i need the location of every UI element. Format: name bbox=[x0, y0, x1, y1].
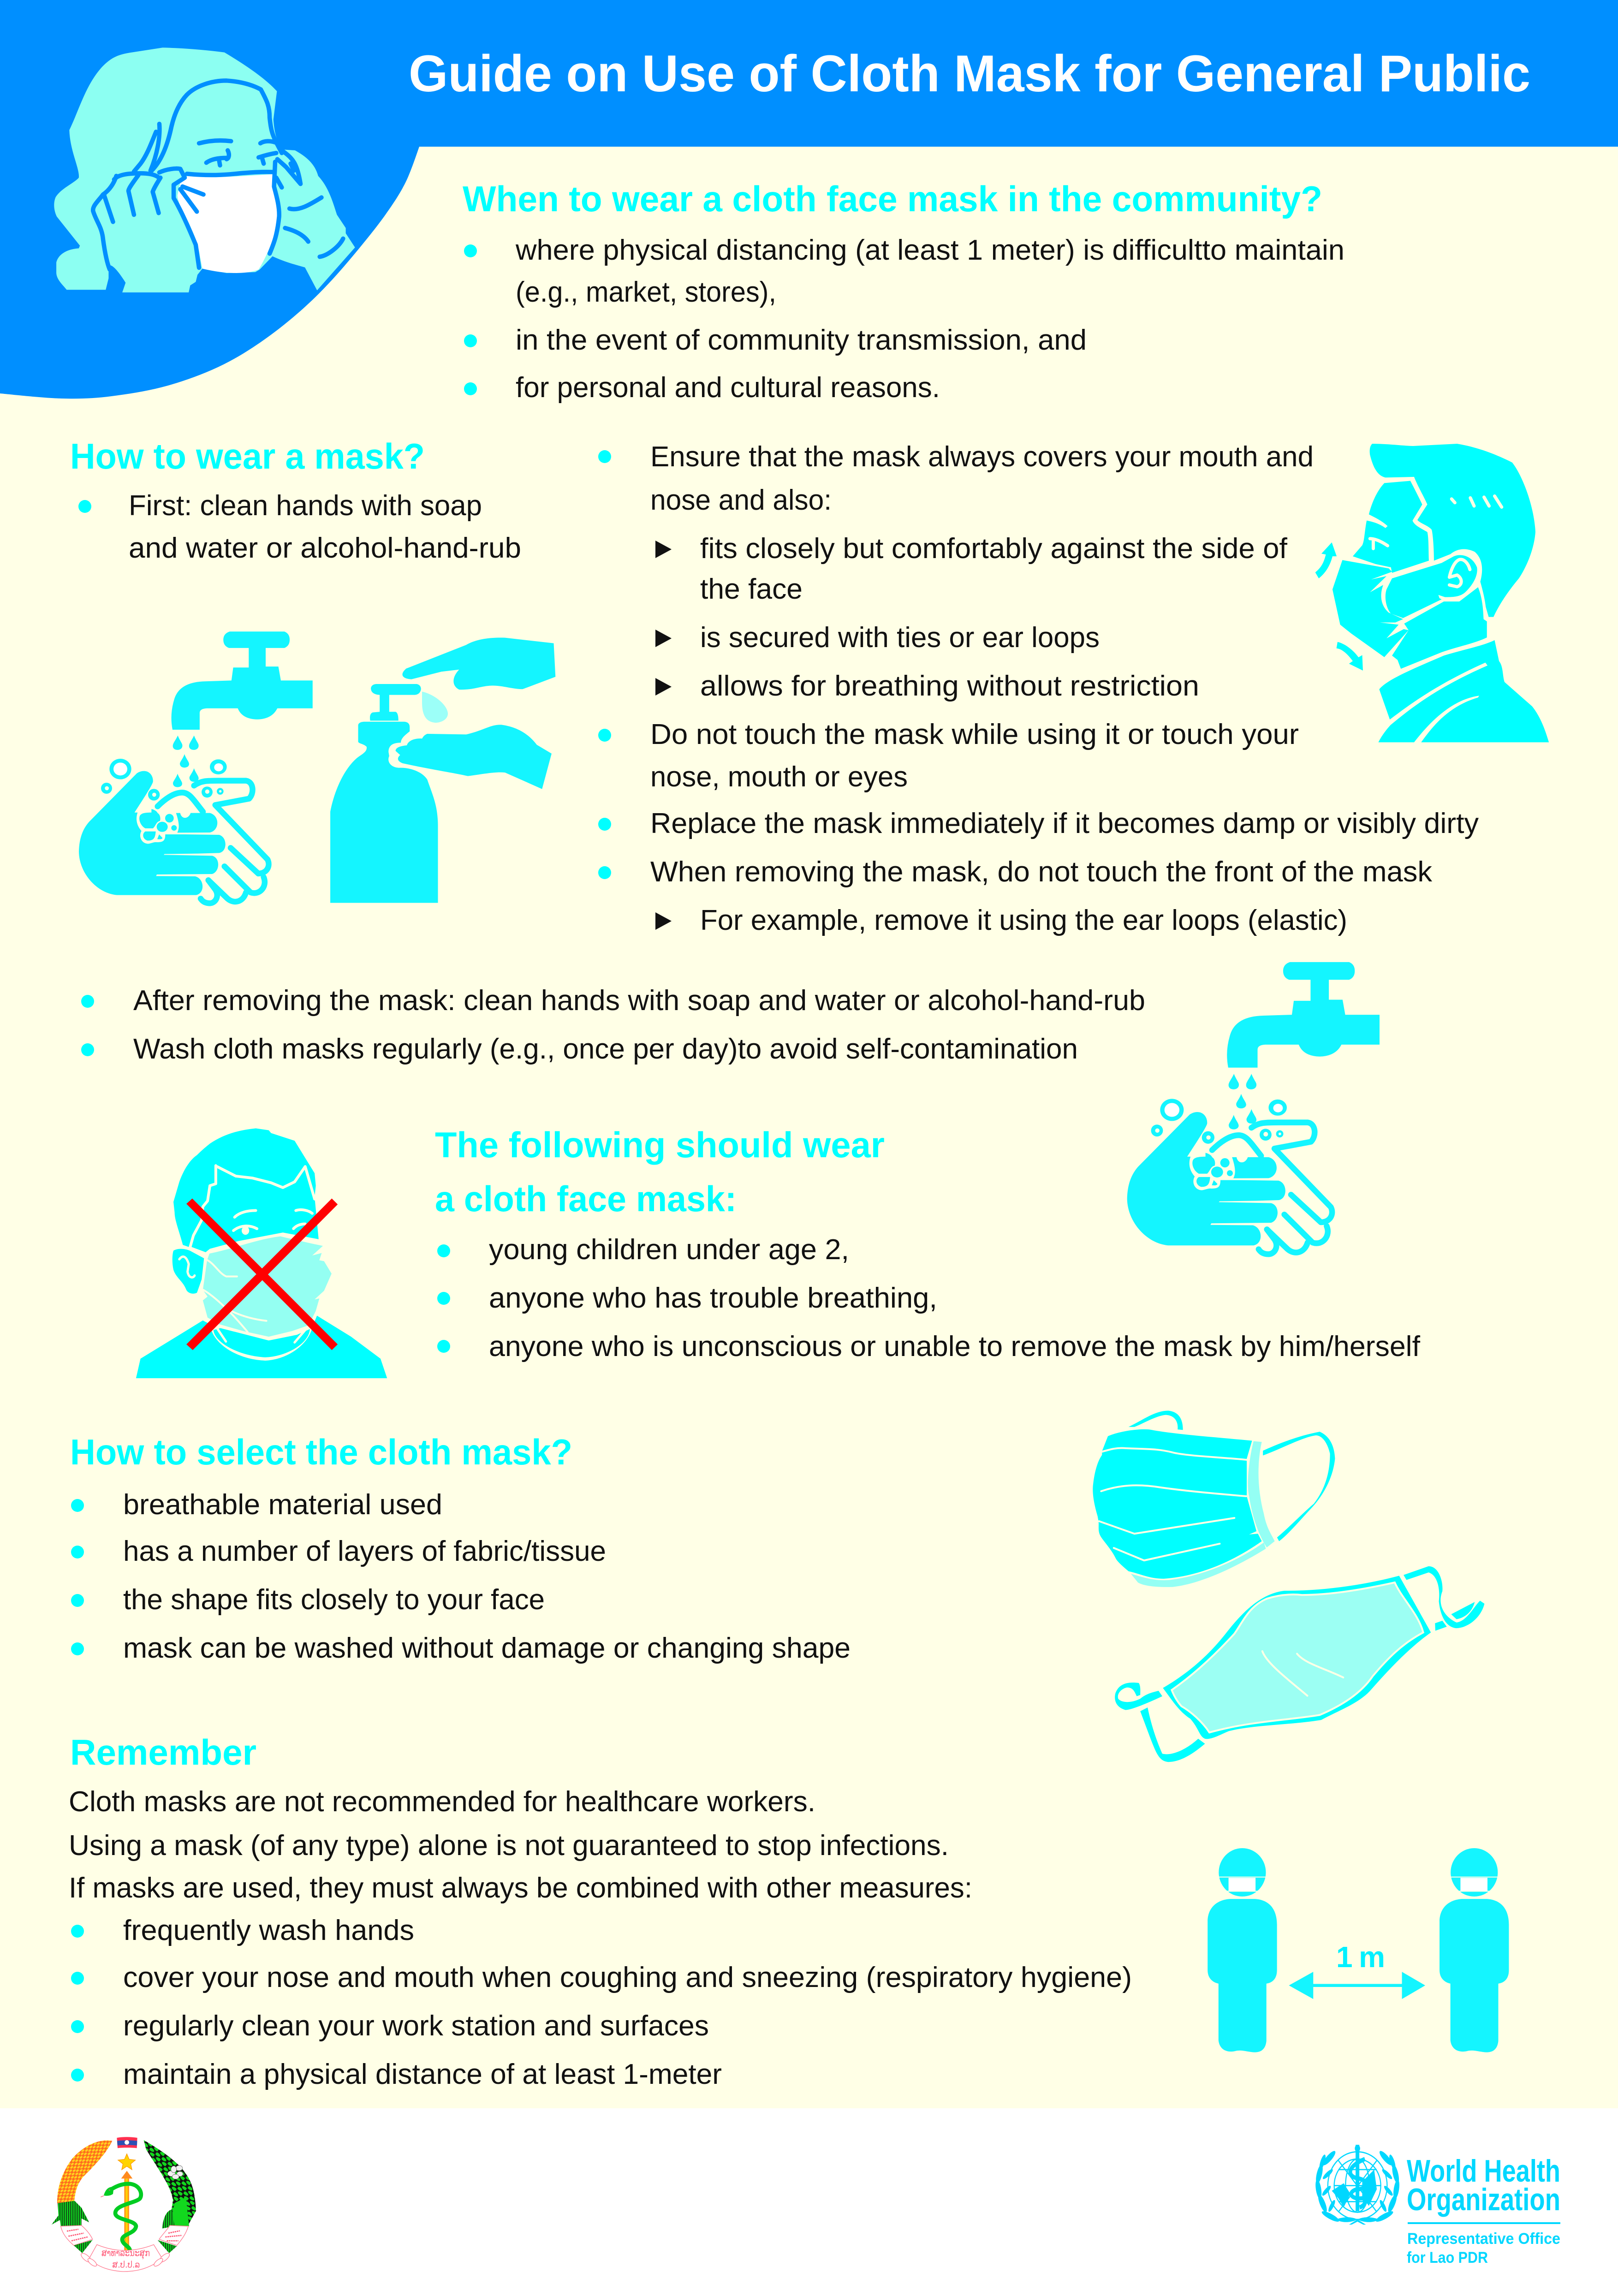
list: how to wear, right column: Replace the mask immediately if it becomes damp or visibly dirty bbox=[650, 808, 1479, 839]
logo: Lao Ministry of Health bbox=[52, 2137, 196, 2272]
list: how to select: mask can be washed without damage or changing shape bbox=[123, 1632, 851, 1664]
list: when to wear: for personal and cultural reasons. bbox=[516, 372, 940, 404]
list: how to wear, right column bbox=[598, 441, 1479, 936]
list: when to wear: where physical distancing (at least 1 meter) is difficultto maintain bbox=[515, 234, 1344, 266]
list: how to select bbox=[71, 1489, 851, 1664]
star bbox=[118, 2154, 135, 2170]
text block: remember intro: Using a mask (of any type) alone is not guaranteed to stop infections. bbox=[69, 1830, 949, 1862]
person right bbox=[1440, 1848, 1509, 2052]
arrow: down bbox=[1337, 642, 1363, 671]
heading: the following should wear bbox=[435, 1124, 885, 1219]
list: remember: maintain a physical distance of at least 1-meter bbox=[123, 2058, 722, 2090]
heading: when to wear: When to wear a cloth face mask in the community? bbox=[463, 178, 1322, 219]
list: when to wear bbox=[464, 234, 1344, 404]
text block: remember intro: If masks are used, they must always be combined with other measures: bbox=[69, 1872, 972, 1904]
lower hand bbox=[396, 725, 552, 789]
WHO wordmark: Organization bbox=[1407, 2182, 1560, 2217]
icon: faucet and washing hands bbox=[79, 631, 313, 903]
list: the following should wear: anyone who is unconscious or unable to remove the mask by him/herself bbox=[489, 1331, 1421, 1362]
person left bbox=[1208, 1848, 1277, 2052]
logo: World Health Organization bbox=[1315, 2145, 1560, 2266]
pleated mask bbox=[1093, 1411, 1335, 1587]
WHO wordmark: World Health bbox=[1407, 2153, 1560, 2189]
list: the following should wear bbox=[437, 1234, 1421, 1362]
red cross bbox=[186, 1198, 338, 1350]
arrow: up bbox=[1315, 542, 1337, 578]
list: how to wear, right column: allows for breathing without restriction bbox=[700, 670, 1199, 702]
label: 1 m: 1 m bbox=[1336, 1940, 1385, 1974]
header band and blue corner circle bbox=[0, 0, 1618, 399]
snake bbox=[101, 2184, 141, 2250]
icon: faucet and washing hands, second bbox=[1127, 962, 1380, 1254]
WHO emblem bbox=[1315, 2145, 1400, 2225]
list: how to wear, right column: nose, mouth or eyes bbox=[650, 761, 908, 793]
icon: two people one metre apart bbox=[1208, 1848, 1509, 2052]
list: remember: regularly clean your work station and surfaces bbox=[123, 2010, 709, 2042]
list: how to wear, right column: fits closely but comfortably against the side of bbox=[700, 533, 1288, 565]
text block: remember intro bbox=[69, 1786, 972, 1904]
ribbon text second line: ສ.ປ.ປ.ລ bbox=[112, 2260, 140, 2270]
icon: man in side profile wearing mask bbox=[1315, 444, 1549, 742]
pump bbox=[370, 684, 421, 720]
text block: first clean hands: First: clean hands with soap bbox=[129, 490, 482, 522]
icon: two cloth masks bbox=[1093, 1411, 1484, 1762]
heading: how to wear a mask: How to wear a mask? bbox=[70, 436, 425, 476]
heading: how to select: How to select the cloth mask? bbox=[70, 1432, 572, 1472]
icon: soap dispenser and hands bbox=[330, 637, 555, 903]
heading: the following should wear: The following should wear bbox=[435, 1124, 885, 1165]
text block: first clean hands: and water or alcohol-hand-rub bbox=[129, 532, 521, 564]
double arrow bbox=[1289, 1972, 1425, 1999]
title: Guide on Use of Cloth Mask for General Public bbox=[409, 45, 1530, 102]
icon: woman putting on a mask bbox=[54, 48, 355, 292]
list: after removing the mask: Wash cloth masks regularly (e.g., once per day)to avoid self-contamination bbox=[133, 1033, 1078, 1065]
upper hand bbox=[402, 637, 555, 690]
ribbons bbox=[61, 2225, 188, 2272]
list: how to wear, right column: Ensure that the mask always covers your mouth and bbox=[650, 441, 1314, 473]
text block: remember intro: Cloth masks are not recommended for healthcare workers. bbox=[69, 1786, 815, 1818]
list: remember: cover your nose and mouth when coughing and sneezing (respiratory hygiene) bbox=[123, 1962, 1132, 1993]
list: how to wear, right column: the face bbox=[700, 573, 803, 605]
ribbon text: ສາທາລະນະສຸກ bbox=[101, 2248, 150, 2260]
flag bbox=[117, 2137, 137, 2148]
list: after removing the mask bbox=[81, 985, 1145, 1065]
heading: the following should wear: a cloth face mask: bbox=[435, 1178, 737, 1219]
WHO wordmark: Representative Office bbox=[1407, 2230, 1560, 2248]
list: when to wear: (e.g., market, stores), bbox=[516, 276, 776, 308]
WHO wordmark bbox=[1407, 2153, 1560, 2266]
staff bbox=[121, 2171, 132, 2251]
WHO wordmark: for Lao PDR bbox=[1407, 2249, 1488, 2266]
text block: first clean hands bbox=[78, 490, 521, 564]
heading: remember: Remember bbox=[70, 1732, 256, 1773]
list: how to wear, right column: nose and also: bbox=[650, 484, 832, 516]
panel: when to wear bbox=[463, 178, 1344, 404]
cloth mask bbox=[1115, 1566, 1484, 1762]
list: how to wear, right column: For example, remove it using the ear loops (elastic) bbox=[700, 904, 1347, 936]
panel: how to select bbox=[70, 1432, 851, 1664]
soap drop bbox=[422, 692, 448, 723]
bottle bbox=[330, 722, 438, 903]
list: how to select: breathable material used bbox=[123, 1489, 442, 1521]
list: when to wear: in the event of community transmission, and bbox=[516, 324, 1087, 356]
list: remember bbox=[71, 1915, 1132, 2090]
list: how to wear, right column: is secured with ties or ear loops bbox=[700, 622, 1100, 654]
list: how to select: has a number of layers of fabric/tissue bbox=[123, 1535, 606, 1567]
icon: child with mask crossed out bbox=[136, 1128, 387, 1378]
list: remember: frequently wash hands bbox=[123, 1915, 414, 1946]
list: the following should wear: young children under age 2, bbox=[489, 1234, 849, 1266]
panel: remember bbox=[69, 1732, 1132, 2090]
list: the following should wear: anyone who has trouble breathing, bbox=[489, 1282, 937, 1314]
list: after removing the mask: After removing the mask: clean hands with soap and water or alcohol-hand-rub bbox=[133, 985, 1145, 1017]
list: how to wear, right column: When removing the mask, do not touch the front of the mask bbox=[650, 856, 1433, 888]
wheat wreath bbox=[57, 2141, 112, 2205]
list: how to wear, right column: Do not touch the mask while using it or touch your bbox=[650, 719, 1299, 750]
list: how to select: the shape fits closely to your face bbox=[123, 1584, 545, 1616]
panel: who should not wear bbox=[435, 1124, 1421, 1362]
green wreath bbox=[144, 2140, 196, 2226]
